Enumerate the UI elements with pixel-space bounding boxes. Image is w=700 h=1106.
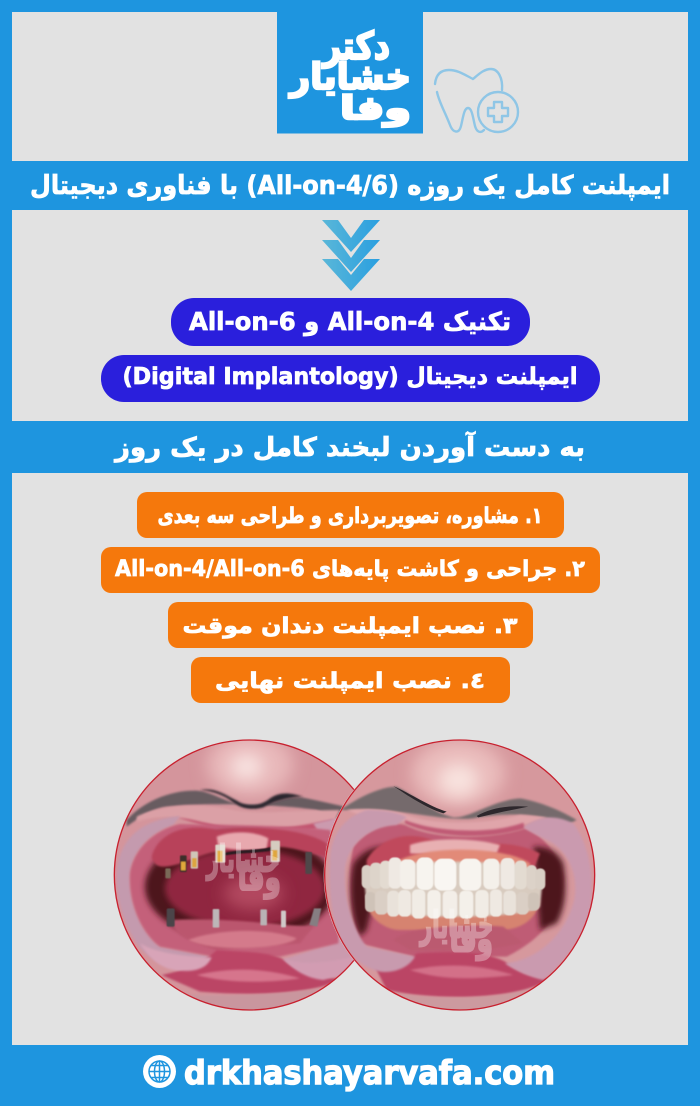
- pill: All-on-4 technique: [171, 298, 530, 346]
- step 3: [168, 602, 533, 648]
- watermark: وفا: [450, 918, 493, 961]
- icon: tooth with plus: [435, 69, 518, 132]
- implants lower: [167, 908, 321, 928]
- photo: after, new teeth: [323, 739, 597, 1013]
- step 1: ۱. مشاوره، تصویربرداری و طراحی سه بعدی: [158, 504, 542, 529]
- step 4: ٤. نصب ایمپلنت نهایی: [215, 669, 485, 694]
- logo: خشایار: [288, 57, 411, 98]
- panel: header: [12, 12, 688, 161]
- step 1: [137, 492, 564, 538]
- icon: globe: [143, 1055, 176, 1088]
- pill: All-on-4 technique: تکنیک All-on-4 و All-on-6: [189, 307, 511, 337]
- panel: techniques: [12, 210, 688, 421]
- subtitle: به دست آوردن لبخند کامل در یک روز: [113, 431, 585, 463]
- teeth backing: [363, 862, 543, 917]
- watermark: وفا: [238, 856, 281, 899]
- upper teeth: [362, 857, 545, 891]
- step 3: ۳. نصب ایمپلنت دندان موقت: [182, 614, 518, 639]
- pill: digital implantology: [101, 355, 600, 402]
- watermark: خشایار: [419, 903, 493, 946]
- watermark: [206, 838, 281, 899]
- logo: دکتر: [321, 24, 390, 68]
- title: ایمپلنت کامل یک روزه (All-on-4/6) با فناوری دیجیتال: [30, 171, 670, 201]
- step 2: ۲. جراحی و کاشت پایه‌های All-on-4/All-on-6: [115, 557, 586, 582]
- watermark: [418, 917, 492, 962]
- watermark: خشایار: [206, 838, 280, 881]
- photo: before, implants: [114, 739, 354, 1011]
- implants upper: [165, 841, 312, 878]
- step 4: [191, 657, 510, 703]
- panel: steps and photos: [12, 473, 688, 1045]
- photos: before and after mouths: [113, 733, 597, 1013]
- logo: [277, 10, 423, 134]
- pill: digital implantology: ایمپلنت دیجیتال (Digital Implantology): [122, 364, 578, 390]
- step 2: [101, 547, 600, 593]
- logo: وفا: [340, 89, 411, 127]
- icon: triple chevron arrow: [322, 220, 380, 291]
- footer website: drkhashayarvafa.com: [184, 1053, 555, 1092]
- lower teeth: [365, 889, 539, 919]
